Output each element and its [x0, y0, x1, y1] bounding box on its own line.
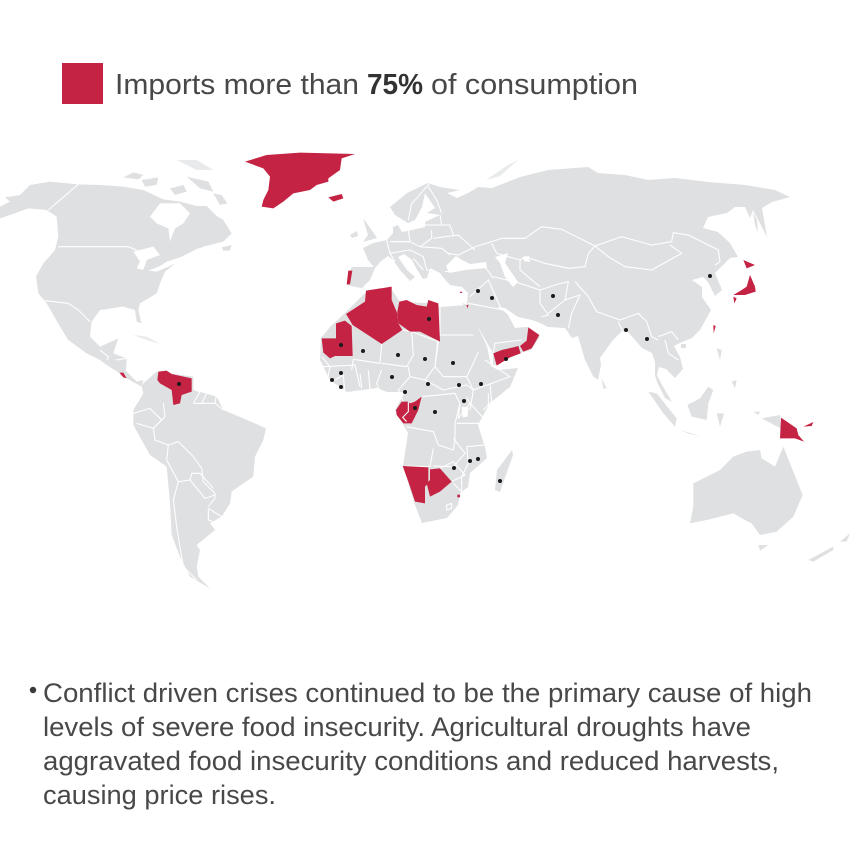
South America	[100, 360, 266, 588]
bullet text	[30, 678, 812, 810]
Japan and Taiwan	[713, 260, 756, 333]
Botswana	[427, 468, 452, 497]
North America	[0, 160, 232, 370]
Southeast Asia islands	[602, 348, 760, 436]
legend label	[115, 69, 638, 101]
Namibia	[403, 466, 428, 503]
world map	[0, 153, 850, 588]
legend label: Imports more than	[115, 69, 359, 101]
Costa Rica	[119, 373, 127, 378]
legend swatch	[62, 63, 103, 104]
bullet paragraph: levels of severe food insecurity. Agricultural droughts have	[43, 712, 751, 742]
legend label: 75%	[367, 69, 423, 101]
food crisis markers	[177, 274, 712, 483]
bullet mark	[30, 687, 36, 693]
legend	[62, 63, 638, 104]
Gabon and Congo	[396, 397, 422, 423]
Papua New Guinea	[780, 418, 813, 442]
Iceland	[328, 194, 343, 202]
bullet paragraph: Conflict driven crises continued to be the primary cause of high	[43, 678, 812, 708]
Eurasia	[347, 160, 790, 402]
Africa	[320, 271, 539, 523]
bullet paragraph: causing price rises.	[43, 780, 276, 810]
Algeria, Libya, Mauritania, Yemen, Oman, Portugal	[322, 271, 539, 366]
bullet paragraph	[43, 678, 812, 810]
Oceania	[690, 415, 850, 562]
Venezuela	[157, 371, 192, 405]
Greenland	[245, 153, 355, 208]
bullet paragraph: aggravated food insecurity conditions and reduced harvests,	[43, 746, 779, 776]
legend label: of consumption	[431, 69, 638, 101]
